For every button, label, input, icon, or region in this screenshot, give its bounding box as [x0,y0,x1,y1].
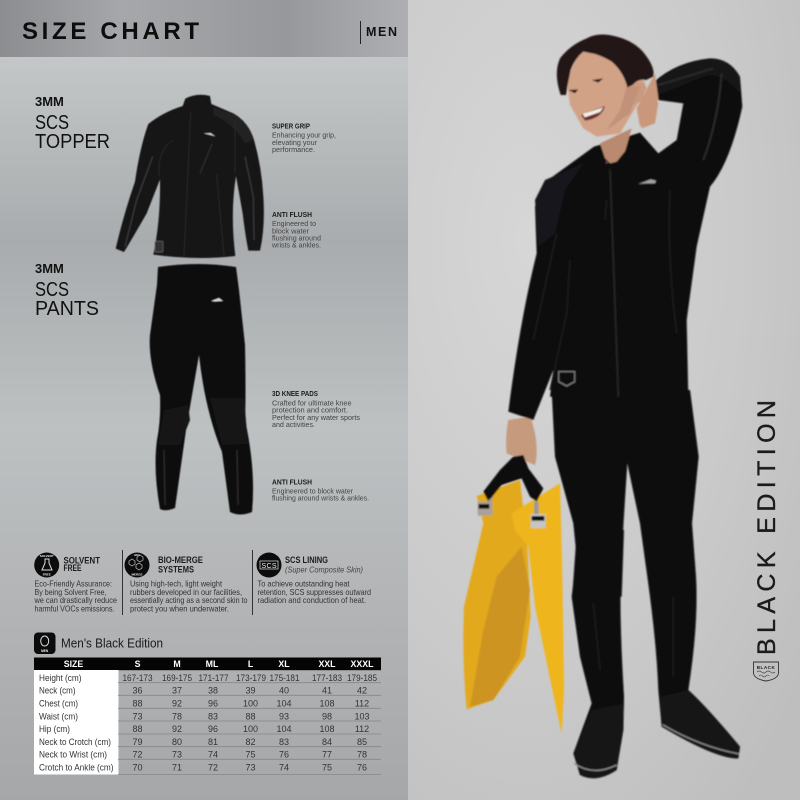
feature: bio-merge systems: essentially acting as a second skin to [130,595,248,605]
row: neck: 42 [357,686,367,696]
feature: bio-merge systems: protect you when underwater. [130,603,229,613]
model: head [557,35,658,137]
feature: solvent free [34,552,117,613]
row: height: 179-185 [347,673,377,683]
table header row: M [173,659,181,669]
icon: molecule badge: BIO [134,553,140,557]
row: neck to wrist [39,750,367,760]
row: hip: 112 [355,724,369,734]
row: neck to crotch: 85 [357,737,367,747]
feature: solvent free: FREE [64,563,82,573]
callout: topper anti flush: Engineered to [272,219,316,228]
row: height: 173-179 [236,673,266,683]
heading: SCS pants: 3MM [35,261,64,276]
row: hip: Hip (cm) [39,724,70,734]
row: crotch to ankle: 75 [322,762,332,772]
table heading [34,632,163,654]
row: waist [39,711,370,721]
row: neck to wrist: 77 [322,750,332,760]
callout: super grip [272,124,336,154]
row: waist: 93 [279,711,289,721]
row: neck to crotch: Neck to Crotch (cm) [39,737,111,747]
row: chest [39,698,369,708]
product image: pants [150,264,253,514]
row: neck to crotch: 84 [322,737,332,747]
feature: solvent free: SOLVENT [64,556,101,566]
row: crotch to ankle: 71 [172,762,182,772]
row: crotch to ankle [39,762,367,772]
feature: solvent free: we can drastically reduce [34,595,117,605]
row: height: 177-183 [312,673,342,683]
row: waist: 73 [132,711,143,721]
callout: pants anti flush: Engineered to block water [272,486,353,496]
table header row: XXXL [351,659,374,669]
row: neck to crotch: 80 [172,737,182,747]
panel: product background [0,57,408,800]
row: hip: 100 [243,724,258,734]
row: neck: 38 [208,686,218,696]
row: waist: 78 [172,711,182,721]
product image: topper jacket [116,95,264,258]
icon: flask badge: SOLVENT [40,554,54,558]
row: crotch to ankle: 76 [357,762,367,772]
row: neck to crotch [39,737,367,747]
feature: SCS lining: To achieve outstanding heat [258,579,350,589]
callout: knee pads: protection and comfort. [272,406,348,415]
row: neck to crotch: 83 [279,737,289,747]
callout: topper anti flush: wrists & ankles. [271,240,321,250]
table header row: XL [278,659,290,669]
callout: knee pads: Crafted for ultimate knee [272,398,352,408]
icon: black badge: BLACK [757,665,775,670]
feature: solvent free: harmful VOCs emissions. [34,603,114,613]
row: crotch to ankle: 73 [245,762,256,772]
row: hip [39,724,369,734]
table header row: L [248,659,254,669]
row: waist: 83 [208,711,218,721]
feature: bio-merge systems [124,552,248,613]
callout: pants anti flush [272,480,369,503]
row: hip: 96 [208,724,218,734]
feature: SCS lining: (Super Composite Skin) [285,566,363,574]
row: chest: 100 [243,698,258,708]
callout: topper anti flush: ANTI FLUSH [272,212,312,219]
row: waist: 103 [354,711,370,721]
category label: MEN [366,25,397,39]
row: height: 167-173 [122,673,152,683]
table header row [64,659,374,669]
row: height: 169-175 [162,673,192,683]
row: neck to wrist: 76 [279,750,289,760]
callout: super grip: Enhancing your grip, [272,130,336,140]
callout: super grip: elevating your [272,138,317,147]
row: hip: 104 [276,724,292,734]
panel: photo background [408,0,800,800]
heading: SCS topper [35,94,110,153]
icon: flask badge [34,552,59,578]
callout: knee pads: and activities. [272,420,315,429]
feature: bio-merge systems: SYSTEMS [158,564,194,574]
row: waist: Waist (cm) [39,711,78,721]
feature: solvent free: Eco-Friendly Assurance: [34,579,112,589]
row: neck: 37 [172,686,182,696]
row: height [39,673,377,683]
table header row: ML [206,659,219,669]
row: height: 171-177 [198,673,228,683]
row: crotch to ankle: 74 [279,762,289,772]
callout: pants anti flush: flushing around wrists & ankles. [272,494,369,503]
category label [360,21,397,44]
row: waist: 88 [245,711,256,721]
row: neck [39,686,367,696]
callout: topper anti flush: flushing around [272,234,321,242]
row: chest: Chest (cm) [39,698,78,708]
model photo [463,35,742,778]
row: waist: 98 [322,711,332,721]
row: chest: 108 [319,698,335,708]
callout: topper anti flush: block water [272,226,309,235]
feature: SCS lining [256,552,371,605]
row: chest: 104 [276,698,292,708]
callout: super grip: performance. [272,145,315,154]
row: neck to wrist: Neck to Wrist (cm) [39,750,107,760]
row: chest: 92 [172,698,182,708]
icon: men badge: MEN [41,649,49,653]
feature: bio-merge systems: Using high-tech, light weight [130,579,223,589]
row: neck to crotch: 79 [132,737,143,747]
icon: molecule badge [124,552,150,578]
row: crotch to ankle: 70 [132,762,143,772]
heading: SCS pants: SCS [35,279,69,301]
row: height: Height (cm) [39,673,82,683]
row: hip: 92 [172,724,182,734]
row: neck to wrist: 74 [208,750,218,760]
row: neck to crotch: 81 [208,737,218,747]
heading: SCS pants: PANTS [35,298,99,320]
heading: SCS pants [35,261,99,320]
callout: knee pads [272,391,360,429]
row: chest: 96 [208,698,218,708]
row: height: 175-181 [270,673,300,683]
row: neck: 40 [279,686,289,696]
row: crotch to ankle: 72 [208,762,218,772]
callout: topper anti flush [271,212,321,250]
callout: knee pads: Perfect for any water sports [272,413,360,422]
row: neck to wrist: 72 [132,750,143,760]
row: chest: 88 [132,698,143,708]
row: hip: 108 [319,724,335,734]
callout: super grip: SUPER GRIP [272,124,310,130]
table heading: Men's Black Edition [61,636,163,650]
vertical label: black edition: BLACK EDITION [753,400,781,655]
icon: molecule badge: MERGE [131,572,143,576]
row: neck: 36 [132,686,143,696]
heading: SCS topper: SCS [35,112,69,134]
feature: bio-merge systems: BIO-MERGE [158,555,203,565]
table header row: S [135,659,141,669]
callout: pants anti flush: ANTI FLUSH [272,480,312,486]
header band [0,0,408,57]
model: legs and boots [552,390,740,778]
row: chest: 112 [355,698,369,708]
row: neck: 41 [322,686,332,696]
table header row: SIZE [64,659,83,669]
row: neck: 39 [245,686,256,696]
feature: SCS lining: retention, SCS suppresses outward [258,587,371,597]
icon: black badge [754,662,778,681]
model: jacket and raised arm [508,58,742,420]
feature: bio-merge systems: rubbers developed in our facilities, [130,587,242,597]
feature: SCS lining: radiation and conduction of heat. [258,595,366,605]
row: hip: 88 [132,724,143,734]
feature: solvent free: By being Solvent Free, [34,587,106,597]
table header row: XXL [318,659,336,669]
icon: flask badge: FREE [43,572,51,576]
heading: SCS topper: TOPPER [35,131,110,153]
model: yellow fins [463,417,564,734]
icon: SCS badge: SCS [262,563,277,570]
row: crotch to ankle: Crotch to Ankle (cm) [39,762,114,772]
callout: knee pads: 3D KNEE PADS [272,391,318,398]
row: neck to wrist: 73 [172,750,182,760]
row: neck to crotch: 82 [245,737,256,747]
row: neck to wrist: 75 [245,750,256,760]
size table [34,658,381,774]
title: SIZE CHART [22,18,199,45]
row: neck: Neck (cm) [39,686,76,696]
row: neck to wrist: 78 [357,750,367,760]
heading: SCS topper: 3MM [35,94,64,109]
feature: SCS lining: SCS LINING [285,555,328,565]
